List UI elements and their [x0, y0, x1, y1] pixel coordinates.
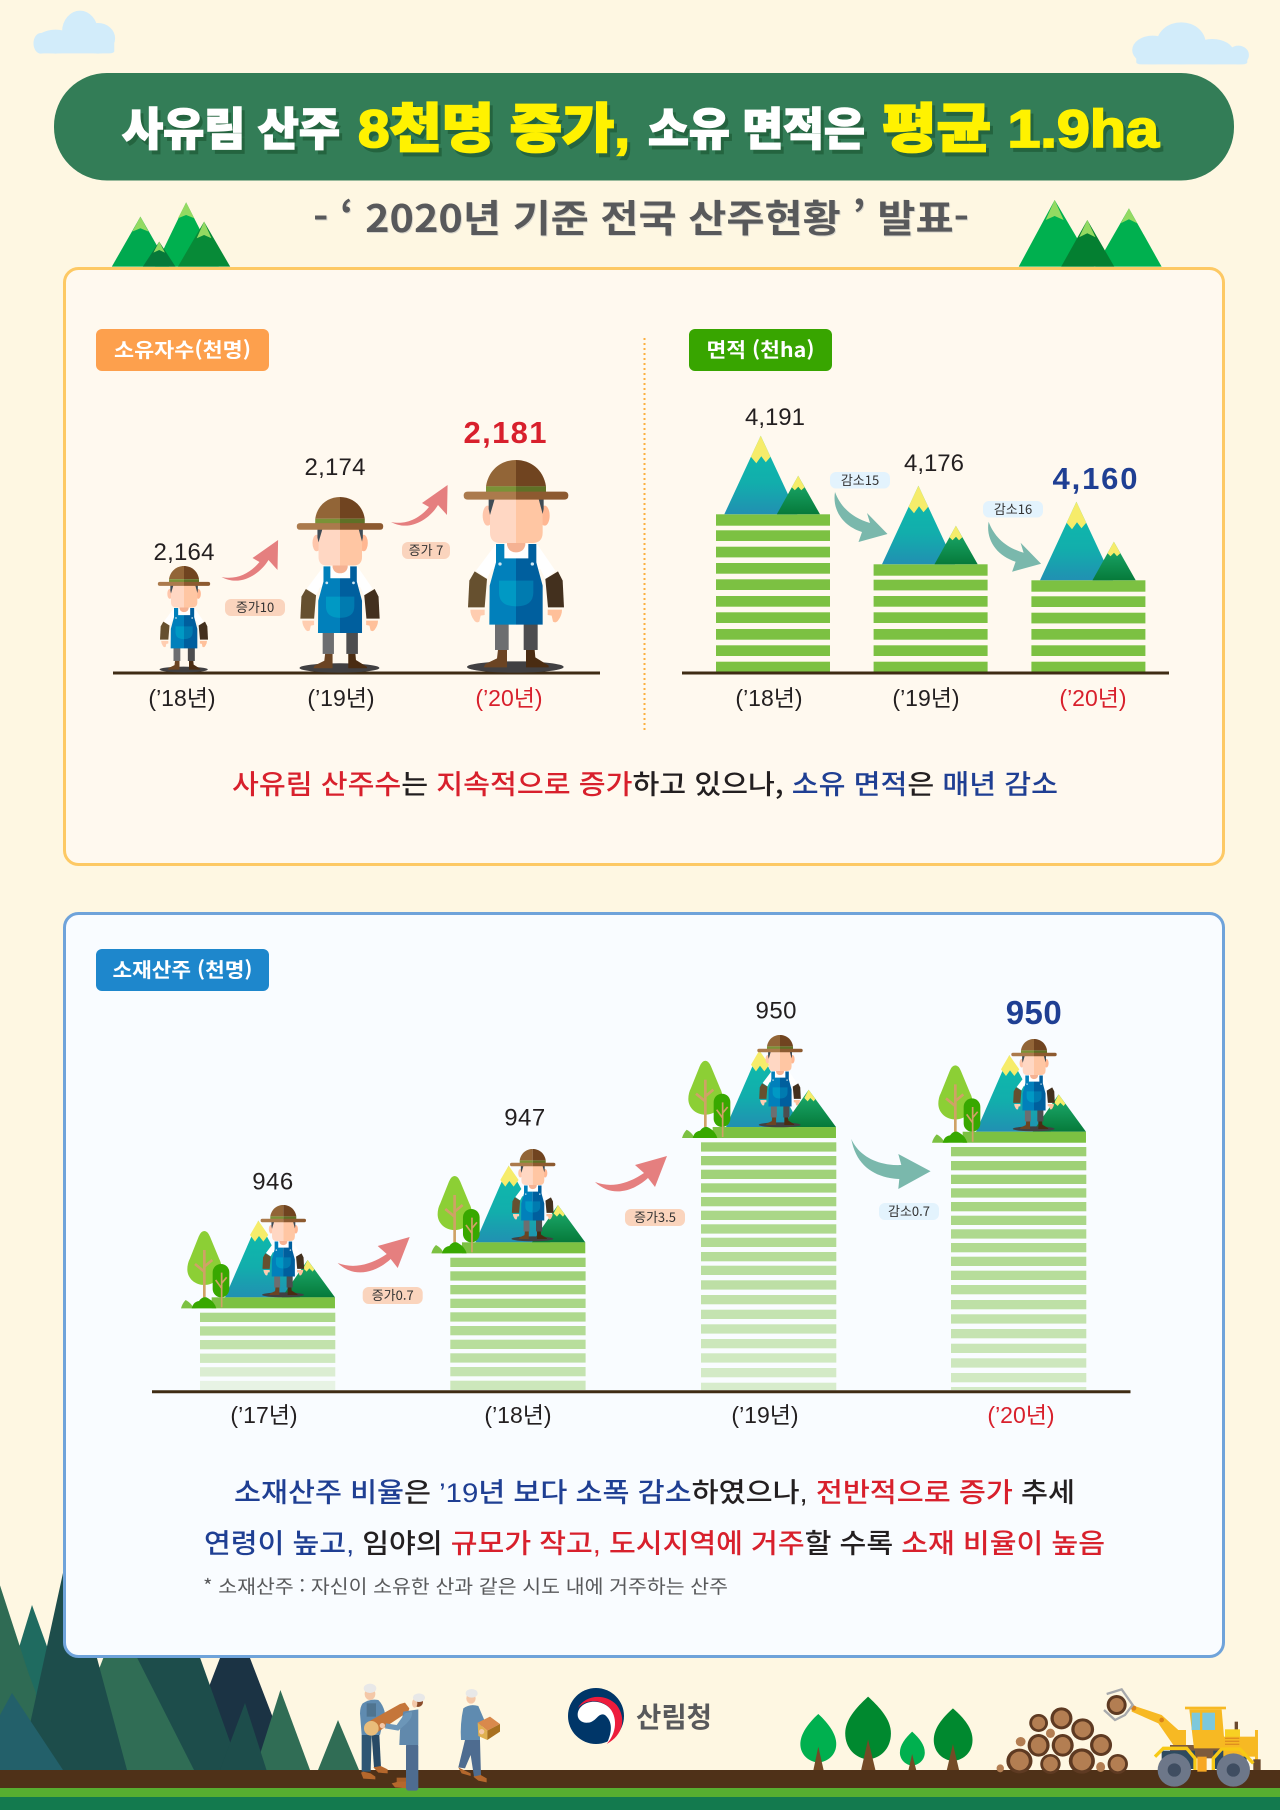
- tag: area: [689, 329, 832, 371]
- icon: small forest right: [1019, 200, 1162, 267]
- area bar 2018: [716, 514, 830, 672]
- year 2017: (’17년): [230, 1402, 298, 1428]
- area bar 2020: [1031, 580, 1145, 672]
- pill increase 7: 증가 7: [409, 540, 443, 559]
- arrow decrease 15: [835, 492, 888, 542]
- stripes 2018: [450, 1258, 586, 1390]
- mountain 2020: [1040, 502, 1136, 580]
- forest bottom left: [0, 1545, 359, 1770]
- tag: area: 면적 (천ha): [706, 334, 814, 363]
- year 2018: (’18년): [735, 685, 803, 711]
- arrow decrease 0.7: [851, 1139, 931, 1189]
- pill decrease 0.7: 감소0.7: [888, 1201, 930, 1220]
- value 2020: 950: [1006, 994, 1062, 1031]
- tag: absentee owners: [96, 949, 269, 991]
- pill increase 0.7: 증가0.7: [372, 1285, 414, 1304]
- farmer 2019: [297, 497, 383, 673]
- summary text: 사유림 산주수 는 지속적으로 증가 하고 있으나, 소유 면적 은 매년 감소: [232, 763, 1058, 802]
- year 2020: (’20년): [987, 1402, 1055, 1428]
- footnote: * 소재산주 : 자신이 소유한 산과 같은 시도 내에 거주하는 산주: [203, 1572, 728, 1599]
- explanation text: [204, 1478, 1105, 1559]
- farmer 2020: [1011, 1039, 1057, 1131]
- panel: absentee owners: [64, 914, 1224, 1656]
- ground: [0, 1770, 1280, 1810]
- farmer 2018: [510, 1149, 555, 1241]
- tag: absentee owners: 소재산주 (천명): [112, 954, 252, 983]
- arrow decrease 16: [988, 522, 1041, 572]
- pill decrease 16: [983, 499, 1043, 518]
- icon: log loader: [1104, 1689, 1261, 1787]
- value 2019: 950: [756, 998, 796, 1024]
- title text: 사유림 산주: [122, 104, 340, 155]
- cloud right: [1132, 22, 1249, 64]
- explanation text: 연령이 높고, 임야의 규모가 작고, 도시지역에 거주 할 수록 소재 비율이 높음: [204, 1529, 1105, 1559]
- pill increase 10: 증가10: [236, 597, 274, 616]
- farmer 2020: [464, 460, 568, 673]
- year 2018: (’18년): [484, 1402, 552, 1428]
- value 2018: 4,191: [745, 404, 805, 431]
- title text: 8천명 증가,: [358, 100, 630, 159]
- logo wordmark: 산림청: [636, 1696, 712, 1736]
- mountain 2018: [724, 436, 820, 514]
- pill increase 0.7: [363, 1285, 423, 1304]
- icon: log pile: [997, 1707, 1128, 1774]
- title banner: [54, 73, 1234, 180]
- scene 2017: [181, 1221, 335, 1308]
- cloud left: [33, 11, 115, 54]
- tag: owners: 소유자수(천명): [114, 334, 251, 363]
- tag: owners: [96, 329, 269, 371]
- value 2020: 2,181: [464, 415, 546, 450]
- year 2019: (’19년): [731, 1402, 799, 1428]
- arrow increase 3.5: [595, 1156, 667, 1191]
- title text: 평균 1.9ha: [882, 100, 1160, 159]
- pill decrease 15: [830, 470, 890, 489]
- year 2018: (’18년): [148, 685, 216, 711]
- year 2020: (’20년): [475, 685, 543, 711]
- pill increase 3.5: 증가3.5: [634, 1207, 676, 1226]
- title text: [122, 100, 1160, 159]
- farmer 2017: [261, 1205, 306, 1297]
- year 2019: (’19년): [307, 685, 375, 711]
- pill decrease 0.7: [879, 1201, 939, 1220]
- scene 2019: [682, 1050, 836, 1138]
- scene 2018: [431, 1166, 585, 1253]
- stripes 2020: [951, 1147, 1086, 1390]
- arrow increase 10: [222, 540, 278, 581]
- icon: workers carrying log: [360, 1684, 500, 1791]
- mountain 2019: [882, 486, 978, 564]
- chart: forest area: [682, 404, 1169, 711]
- area bar 2019: [874, 564, 988, 672]
- stripes 2017: [200, 1313, 335, 1390]
- farmer 2018: [158, 566, 210, 672]
- pill increase 3.5: [625, 1207, 685, 1226]
- pill decrease 16: 감소16: [994, 499, 1032, 518]
- subtitle: - ‘ 2020년 기준 전국 산주현황 ’ 발표-: [313, 188, 969, 243]
- pill increase 10: [225, 597, 285, 616]
- value 2018: 947: [504, 1104, 545, 1132]
- pill decrease 15: 감소15: [841, 470, 879, 489]
- icon: broadleaf trees: [800, 1697, 973, 1770]
- value 2020: 4,160: [1052, 461, 1138, 496]
- arrow increase 7: [391, 485, 448, 526]
- arrow increase 0.7: [338, 1237, 410, 1272]
- icon: small forest left: [112, 202, 230, 267]
- chart: number of owners: [113, 415, 600, 711]
- stripes 2019: [701, 1142, 836, 1390]
- value 2017: 946: [252, 1168, 293, 1196]
- scene 2020: [932, 1055, 1086, 1143]
- value 2019: 2,174: [304, 454, 366, 481]
- divider: [644, 338, 646, 733]
- icon: forest service logo: [568, 1688, 624, 1744]
- farmer 2019: [757, 1035, 803, 1127]
- explanation text: 소재산주 비율 은 ’19년 보다 소폭 감소 하였으나, 전반적으로 증가 추세: [234, 1478, 1075, 1508]
- year 2020: (’20년): [1059, 685, 1127, 711]
- chart: absentee owners: [152, 994, 1130, 1428]
- value 2018: 2,164: [154, 539, 214, 566]
- year 2019: (’19년): [892, 685, 960, 711]
- title text: 소유 면적은: [648, 104, 865, 155]
- panel: owners and area: [64, 268, 1224, 864]
- value 2019: 4,176: [904, 450, 964, 477]
